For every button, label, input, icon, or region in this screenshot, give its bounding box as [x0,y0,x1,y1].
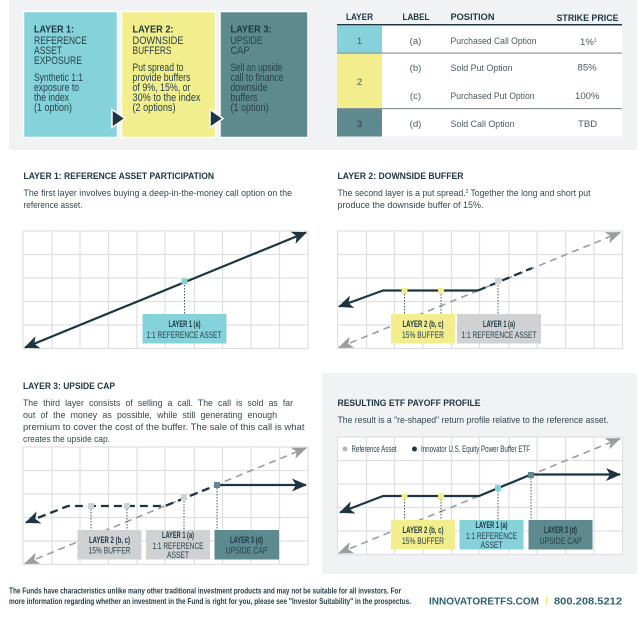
box: layer 1: exposure to [34,82,79,94]
box: layer 2 [122,12,216,138]
panel: layer 3 upside cap [23,381,308,564]
box: layer 2: 30% to the index [132,92,201,104]
box: layer 3: call to finance [230,72,284,84]
table: option layers: 100% [575,91,600,102]
legend [342,444,530,454]
table: option layers: LABEL [402,12,430,22]
text block: The second layer is a put spread. [338,188,479,199]
text block: 2 [466,189,468,195]
callout: layer 1 [142,314,226,344]
table: option layers: Sold Call Option [450,119,514,130]
table: option layers: 3 [357,119,362,130]
table: option layers: 1% [580,37,594,48]
box: layer 2: provide buffers [132,72,191,84]
footer contact: INNOVATORETFS.COM [429,596,539,608]
table: option layers: 85% [578,62,597,74]
callout: layer 1: LAYER 1 (a) [168,319,200,329]
box: layer 1: REFERENCE [34,35,87,47]
box: layer 1: the index [34,92,69,104]
table: option layers [337,12,622,136]
callout: layer 2: LAYER 2 (b, c) [402,319,444,329]
footer contact: 800.208.5212 [554,596,622,608]
panel: resulting ETF payoff profile [322,373,637,574]
text block [23,398,305,445]
text block [24,188,292,211]
box: layer 2: LAYER 2: [132,24,174,36]
table: option layers: Sold Put Option [450,63,512,74]
callout: layer 1: 1:1 REFERENCE [466,531,517,542]
callout: layer 2 [391,520,455,550]
box: layer 2: of 9%, 15%, or [132,82,191,94]
table: option layers: (b) [410,63,421,74]
box: layer 3: Sell an upside [230,62,282,74]
callout: layer 1 [457,314,541,344]
table: option layers: Purchased Put Option [450,91,534,102]
chart: layer 3 [23,447,308,564]
callout: layer 3 [214,530,279,560]
heading: LAYER 2: DOWNSIDE BUFFER [338,171,464,181]
callout: layer 2: LAYER 2 (b, c) [89,535,130,545]
callout: layer 2 [78,530,142,560]
footer contact [429,596,622,608]
text block [338,188,591,211]
arrow: layer 2 to layer 3 [210,110,223,128]
callout: layer 1 [146,530,210,561]
callout: layer 2: 15% BUFFER [402,330,444,341]
box: layer 1: Synthetic 1:1 [34,72,83,84]
text block: reference asset. [24,200,82,211]
box: layer 2: (2 options) [132,102,176,114]
box: layer 1: (1 option) [34,102,72,114]
box: layer 3: CAP [230,45,250,57]
table: option layers: POSITION [450,12,495,22]
legend: Reference Asset [352,444,397,454]
box: layer 2: Put spread to [132,62,184,74]
chart: layer 1 [23,231,308,348]
box: layer 2: BUFFERS [132,45,172,57]
panel: layer 1 reference asset participation [23,171,308,348]
table: option layers: TBD [578,119,597,130]
box: layer 3: (1 option) [230,102,268,114]
heading: LAYER 3: UPSIDE CAP [23,381,115,391]
text block: Together the long and short put [468,188,591,199]
table: option layers: Purchased Call Option [450,36,536,47]
box: layer 1: LAYER 1: [34,24,74,36]
callout: layer 1: LAYER 1 (a) [476,520,508,530]
callout: layer 2: 15% BUFFER [88,546,131,556]
callout: layer 3: LAYER 3 (d) [544,525,577,535]
table: option layers: (d) [410,119,421,130]
footer disclaimer: more information regarding whether an investment in the Fund is right for you, please see "Investor Suitability" in the prospectus. [9,596,411,606]
legend: Innovator U.S. Equity Power Buffer ETF [421,444,530,454]
callout: layer 3: LAYER 3 (d) [230,535,263,545]
table: option layers: STRIKE PRICE [556,13,618,23]
arrow: layer 1 to layer 2 [112,110,125,128]
box: layer 1: ASSET [34,45,62,57]
box: layer 1 [24,12,118,138]
box: layer 3 [220,12,308,138]
callout: layer 1: ASSET [167,550,189,561]
text block: out of the money as possible, while still generating enough [23,410,277,421]
text block: premium to cover the cost of the buffer. The sale of this call is what [23,422,305,433]
panel: layer overview [9,0,637,150]
callout: layer 1: 1:1 REFERENCE [152,541,204,552]
table: option layers: LAYER [346,12,373,22]
callout: layer 3: UPSIDE CAP [226,546,268,556]
box: layer 2: DOWNSIDE [132,35,184,47]
table: option layers: 2 [357,77,362,88]
text block: The third layer consists of selling a call. The call is sold as far [23,398,294,409]
callout: layer 1: 1:1 REFERENCE ASSET [462,330,537,341]
box: layer 1: EXPOSURE [34,55,82,67]
callout: layer 3: UPSIDE CAP [540,536,582,547]
heading: LAYER 1: REFERENCE ASSET PARTICIPATION [24,171,214,181]
table: option layers: (c) [410,91,421,102]
callout: layer 1: ASSET [480,540,503,551]
callout: layer 1 [460,520,524,551]
table: option layers: 1 [357,36,362,47]
callout: layer 2 [391,314,455,344]
chart: layer 2 [338,231,622,348]
box: layer 3: LAYER 3: [230,24,272,36]
callout: layer 1: 1:1 REFERENCE ASSET [146,330,222,341]
text block: The first layer involves buying a deep-in-the-money call option on the [24,188,292,199]
footer disclaimer [9,586,411,606]
box: layer 3: buffers [230,92,258,104]
chart: payoff profile [338,437,622,554]
box: layer 3: downside [230,82,268,94]
table: option layers: 1 [594,38,597,44]
text block: The result is a "re-shaped" return profile relative to the reference asset. [338,415,608,426]
callout: layer 2: LAYER 2 (b, c) [402,525,444,535]
callout: layer 3 [528,520,592,550]
callout: layer 2: 15% BUFFER [402,536,444,547]
callout: layer 1: LAYER 1 (a) [483,319,515,329]
table: option layers: (a) [410,36,421,47]
callout: layer 1: LAYER 1 (a) [162,530,194,540]
heading: RESULTING ETF PAYOFF PROFILE [338,398,480,408]
footer disclaimer: The Funds have characteristics unlike many other traditional investment products and may not be suitable for all investors. For [9,586,402,596]
text block: creates the upside cap. [23,434,110,445]
text block: produce the downside buffer of 15%. [338,200,484,211]
panel: layer 2 downside buffer [338,171,622,348]
box: layer 3: UPSIDE [230,35,262,47]
